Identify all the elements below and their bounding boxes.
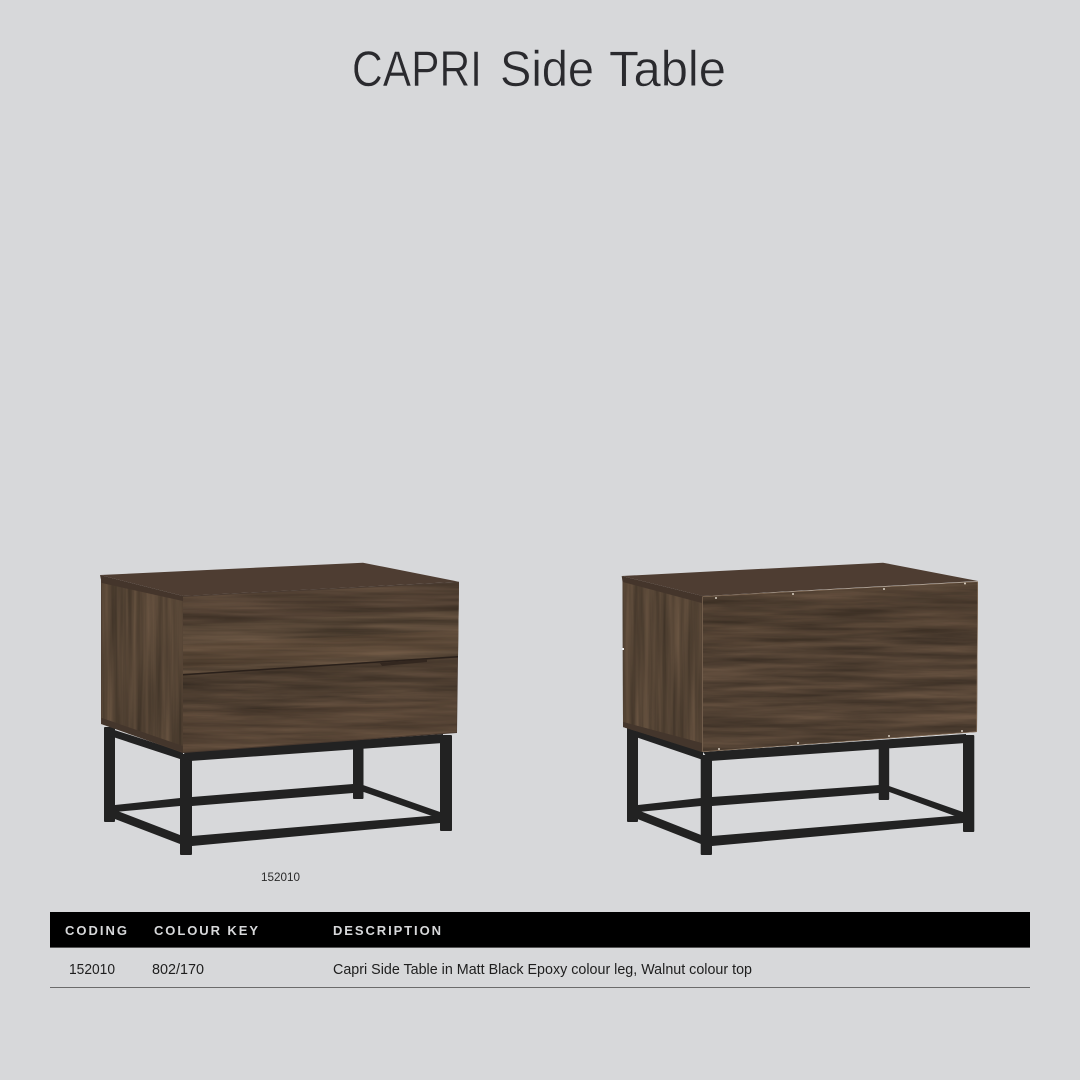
side panel xyxy=(621,580,703,745)
title: Side xyxy=(500,41,594,97)
image caption: 152010 xyxy=(261,870,300,884)
cabinet backing xyxy=(622,580,978,752)
header: coding: CODING xyxy=(65,923,127,938)
cell: description: Capri Side Table in Matt Black Epoxy colour leg, Walnut colour top xyxy=(333,962,752,978)
title: Table xyxy=(609,41,726,97)
drawer gap mark xyxy=(622,648,624,650)
table top xyxy=(622,563,978,596)
header: description: DESCRIPTION xyxy=(333,923,441,938)
side panel xyxy=(100,580,184,750)
title xyxy=(352,41,726,97)
metal base frame xyxy=(104,727,452,855)
title: CAPRI xyxy=(352,41,482,97)
lower drawer xyxy=(183,666,457,752)
metal base frame xyxy=(627,727,974,855)
cell: coding: 152010 xyxy=(69,962,115,978)
table top xyxy=(100,563,459,596)
table header bar xyxy=(50,912,1030,948)
panel fixing screws xyxy=(715,582,966,750)
product image: side table front view xyxy=(100,563,460,855)
drawer gap and handle xyxy=(183,656,458,676)
upper drawer xyxy=(183,582,460,675)
cabinet backing xyxy=(101,580,459,753)
cell: colour key: 802/170 xyxy=(152,962,204,978)
back panel xyxy=(702,581,979,753)
table row xyxy=(69,962,752,978)
back panel edge xyxy=(703,582,978,752)
product image: side table back view xyxy=(621,563,979,855)
header: colour key: COLOUR KEY xyxy=(154,923,258,938)
